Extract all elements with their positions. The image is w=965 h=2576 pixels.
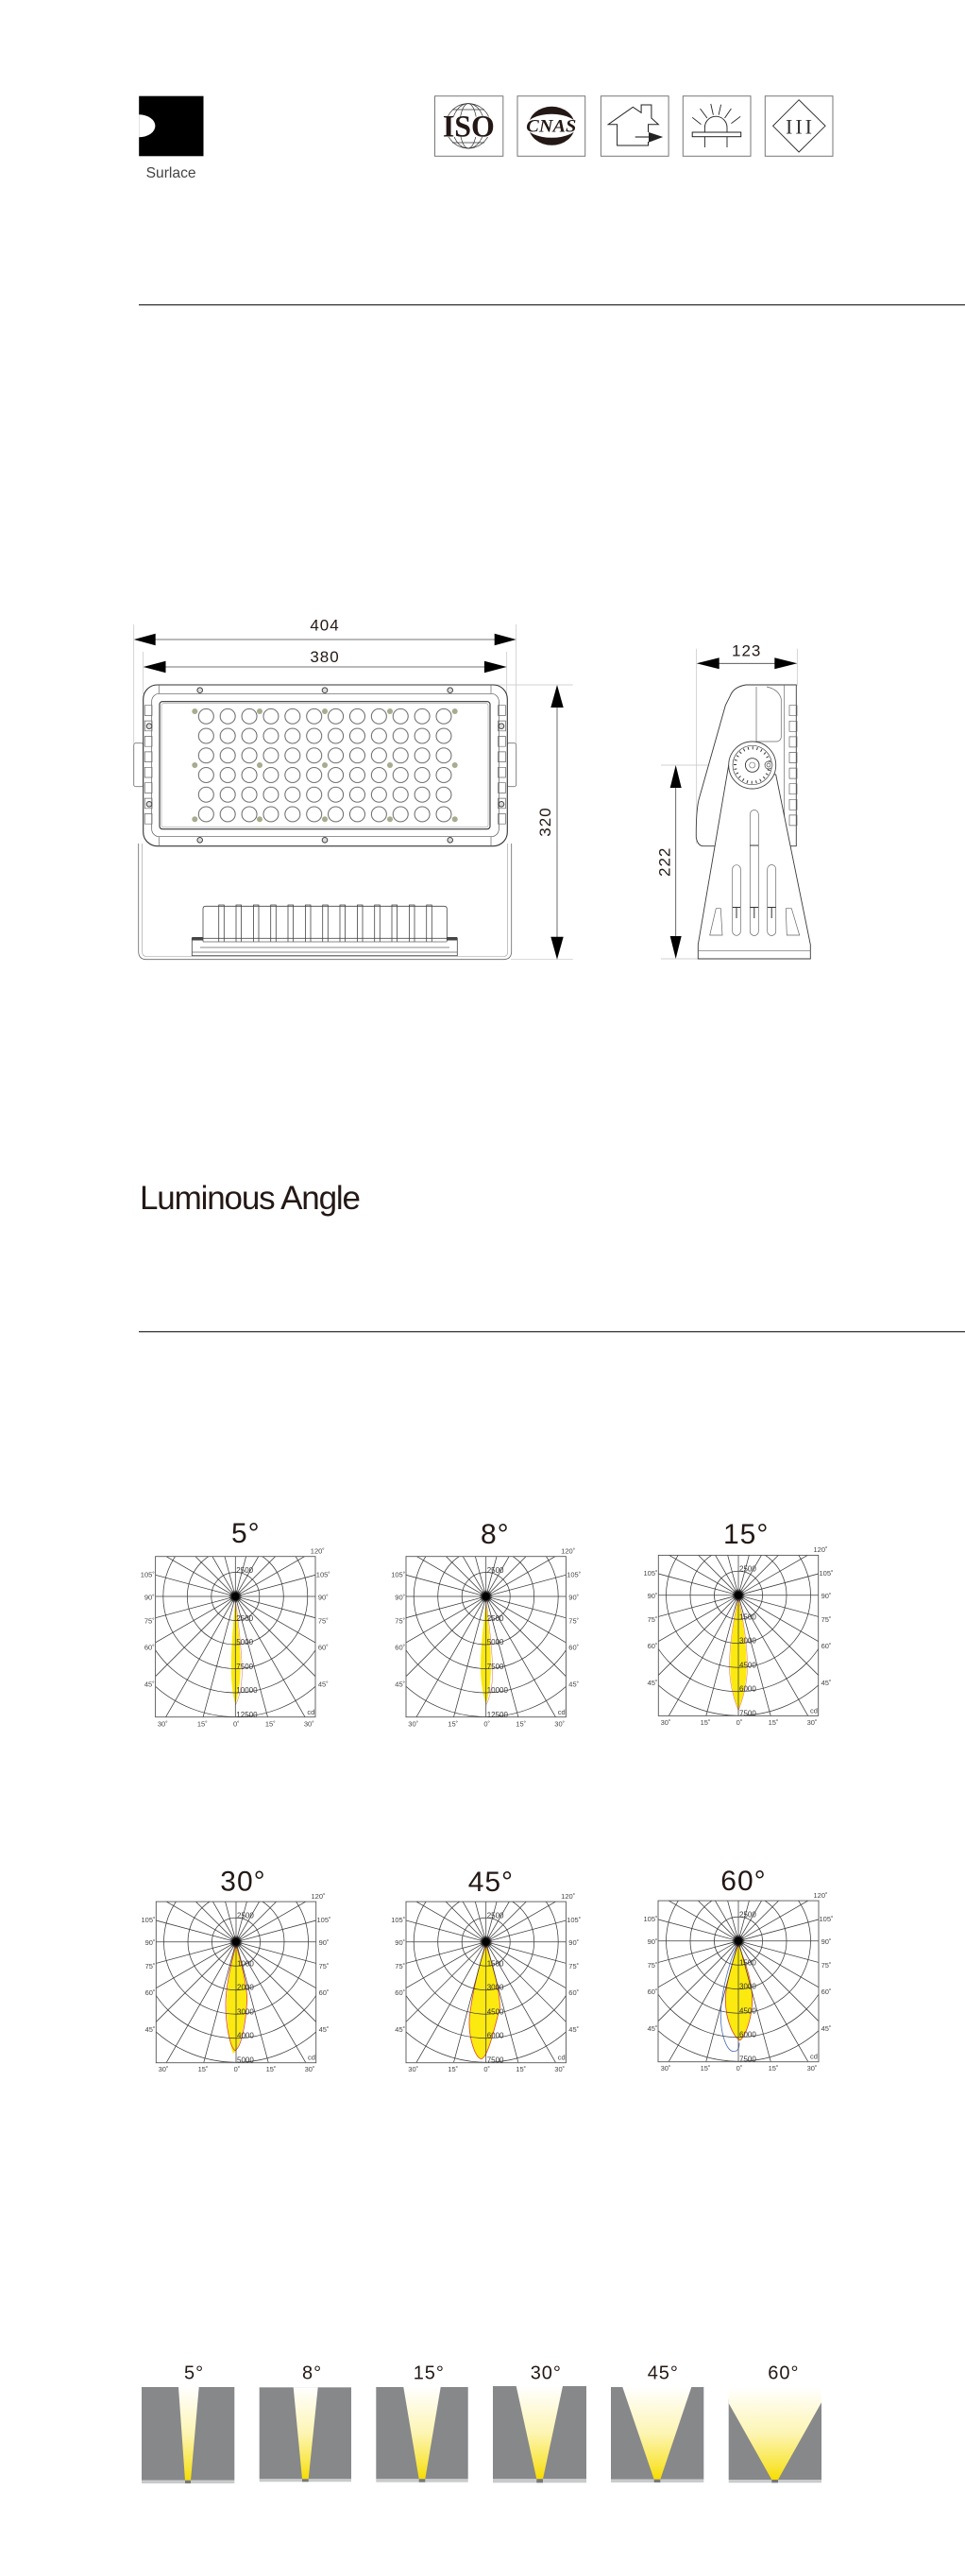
beam panel 60 degrees <box>729 2363 821 2482</box>
polar chart 60 degrees: 0˚ <box>736 2064 742 2073</box>
divider rule <box>139 304 965 305</box>
polar chart 5 degrees: 7500 <box>236 1663 254 1671</box>
chart title: 8° <box>481 1519 510 1550</box>
polar chart 8 degrees: 120˚ <box>561 1547 575 1555</box>
polar chart 45 degrees: 3000 <box>487 1984 504 1992</box>
polar chart 30 degrees: 90˚ <box>145 1938 155 1947</box>
dimension 404: 404 <box>310 617 340 635</box>
polar chart 45 degrees: 0˚ <box>483 2065 490 2073</box>
side view technical drawing <box>655 641 810 959</box>
polar chart 30 degrees: cd <box>308 2054 315 2062</box>
icon: class III <box>765 96 833 156</box>
polar chart 15 degrees: 15˚ <box>769 1718 778 1727</box>
polar chart 15 degrees: 90˚ <box>821 1592 831 1600</box>
beam panel 8 degrees <box>260 2363 351 2482</box>
stand <box>698 765 810 959</box>
beam panel 30 degrees: 30° <box>531 2363 562 2383</box>
dimension 380: 380 <box>310 648 340 666</box>
polar chart 8 degrees: 60˚ <box>395 1644 405 1651</box>
front view technical drawing <box>134 617 573 960</box>
lamp housing <box>696 685 797 846</box>
polar chart 5 degrees: 90˚ <box>318 1593 329 1602</box>
polar chart 8 degrees: 2500 <box>487 1566 504 1575</box>
polar chart 15 degrees: 75˚ <box>648 1615 657 1624</box>
divider rule <box>139 1331 965 1332</box>
polar chart 45 degrees: 90˚ <box>395 1938 405 1947</box>
polar chart 30 degrees: 120˚ <box>311 1892 326 1901</box>
polar chart 8 degrees: 15˚ <box>448 1719 458 1729</box>
polar chart 5 degrees: 60˚ <box>144 1644 155 1651</box>
polar chart 8 degrees <box>250 1360 722 1833</box>
polar chart 15 degrees: 4500 <box>739 1662 756 1670</box>
beam panel 15 degrees: 15° <box>414 2363 445 2383</box>
polar chart 5 degrees: 30˚ <box>304 1719 314 1729</box>
polar chart 8 degrees: 0˚ <box>483 1719 490 1729</box>
polar chart 30 degrees: 45˚ <box>319 2025 329 2034</box>
polar chart 60 degrees <box>502 1705 965 2177</box>
icon: CNAS: CNAS <box>526 116 576 136</box>
polar chart 8 degrees: 105˚ <box>391 1570 405 1579</box>
polar chart 30 degrees: 2500 <box>237 1912 254 1920</box>
chart title: 5° <box>231 1518 261 1549</box>
polar chart 8 degrees: 10000 <box>487 1686 508 1695</box>
polar chart 30 degrees: 15˚ <box>266 2065 276 2073</box>
polar chart 60 degrees: 60˚ <box>821 1987 831 1996</box>
extension lines <box>134 624 573 960</box>
polar chart 45 degrees: 7500 <box>487 2056 504 2065</box>
polar chart 60 degrees: 6000 <box>739 2031 756 2039</box>
polar chart 5 degrees: 0˚ <box>233 1719 240 1729</box>
polar chart 30 degrees: 60˚ <box>319 1988 329 1997</box>
polar chart 8 degrees: 105˚ <box>567 1570 581 1579</box>
polar chart 15 degrees: cd <box>810 1707 818 1715</box>
chart title: 30° <box>220 1866 266 1897</box>
polar chart 5 degrees: 15˚ <box>197 1719 208 1729</box>
polar chart 5 degrees: 5000 <box>236 1638 254 1646</box>
polar chart 60 degrees: 75˚ <box>648 1961 657 1970</box>
polar chart 45 degrees: 45˚ <box>395 2025 405 2034</box>
polar chart 15 degrees: 15˚ <box>701 1718 710 1727</box>
polar chart 45 degrees: 105˚ <box>567 1916 581 1924</box>
polar chart 45 degrees: 75˚ <box>395 1962 405 1970</box>
polar chart 5 degrees: 105˚ <box>141 1570 155 1579</box>
polar chart 45 degrees: 15˚ <box>448 2065 458 2073</box>
polar chart 60 degrees: 30˚ <box>661 2064 670 2073</box>
polar chart 45 degrees: 4500 <box>487 2008 504 2017</box>
dimension 320 <box>536 685 564 960</box>
dimension 222 <box>655 765 682 959</box>
extension lines <box>661 649 797 959</box>
polar chart 15 degrees: 6000 <box>739 1685 756 1694</box>
polar chart 15 degrees: 105˚ <box>819 1569 834 1578</box>
icon: indoor use house <box>601 96 669 156</box>
polar chart 8 degrees: 45˚ <box>568 1680 579 1689</box>
beam panel 30 degrees <box>493 2363 586 2482</box>
polar chart 5 degrees: 12500 <box>236 1711 258 1719</box>
lamp body <box>144 685 507 846</box>
polar chart 60 degrees: cd <box>810 2053 818 2061</box>
heat sink and base <box>192 905 457 956</box>
icon: surface mount <box>139 96 204 156</box>
polar chart 15 degrees: 45˚ <box>821 1679 831 1687</box>
polar chart 5 degrees: 45˚ <box>144 1680 155 1689</box>
polar chart 45 degrees: cd <box>558 2054 566 2062</box>
icon: class III: III <box>786 115 815 138</box>
polar chart 30 degrees: 1000 <box>237 1960 254 1969</box>
dimension 320: 320 <box>536 807 554 837</box>
polar chart 8 degrees: 5000 <box>487 1638 504 1646</box>
heading: Luminous Angle: Luminous Angle <box>140 1180 361 1217</box>
beam panel 45 degrees: 45° <box>648 2363 679 2383</box>
dimension 222: 222 <box>655 847 673 877</box>
polar chart 5 degrees: 10000 <box>236 1686 258 1695</box>
polar chart 8 degrees: 90˚ <box>395 1593 405 1602</box>
polar chart 30 degrees: 75˚ <box>145 1962 155 1970</box>
polar chart 5 degrees: 60˚ <box>318 1644 329 1651</box>
beam panel 5 degrees: 5° <box>184 2363 204 2383</box>
polar chart 5 degrees: 75˚ <box>318 1617 329 1625</box>
polar chart 15 degrees: 60˚ <box>821 1642 831 1650</box>
polar chart 45 degrees: 120˚ <box>561 1892 575 1901</box>
polar chart 15 degrees: 75˚ <box>821 1615 831 1624</box>
polar chart 15 degrees: 0˚ <box>736 1718 742 1727</box>
polar chart 60 degrees: 3000 <box>739 1983 756 1991</box>
polar chart 45 degrees: 1500 <box>487 1960 504 1969</box>
polar chart 15 degrees: 3000 <box>739 1637 756 1646</box>
polar chart 45 degrees: 30˚ <box>408 2065 418 2073</box>
side tabs <box>144 706 506 824</box>
polar chart 30 degrees: 60˚ <box>145 1988 155 1997</box>
screws <box>146 688 504 843</box>
polar chart 45 degrees: 75˚ <box>568 1962 579 1970</box>
mounting bracket <box>139 844 512 960</box>
polar chart 60 degrees: 15˚ <box>701 2064 710 2073</box>
polar chart 8 degrees: 12500 <box>487 1711 508 1719</box>
polar chart 5 degrees: 2500 <box>236 1614 254 1623</box>
icon: ISO <box>434 96 503 156</box>
chart title: 45° <box>468 1867 514 1898</box>
polar chart 45 degrees: 2500 <box>487 1912 504 1920</box>
polar chart 8 degrees: 15˚ <box>516 1719 526 1729</box>
beam panel 15 degrees <box>376 2363 468 2482</box>
polar chart 15 degrees: 1500 <box>739 1613 756 1622</box>
icon: LED <box>683 96 751 156</box>
polar chart 60 degrees: 90˚ <box>648 1937 657 1946</box>
adjustment dial <box>729 742 776 789</box>
beam panel 8 degrees: 8° <box>302 2363 322 2383</box>
label: Surlace: Surlace <box>146 165 196 181</box>
beam panel 45 degrees <box>611 2363 703 2482</box>
polar chart 30 degrees: 4000 <box>237 2032 254 2040</box>
polar chart 60 degrees: 105˚ <box>819 1915 834 1923</box>
polar chart 30 degrees: 75˚ <box>319 1962 329 1970</box>
polar chart 8 degrees: 60˚ <box>568 1644 579 1651</box>
polar chart 8 degrees: 7500 <box>487 1663 504 1671</box>
polar chart 60 degrees: 7500 <box>739 2056 756 2064</box>
polar chart 45 degrees: 15˚ <box>516 2065 526 2073</box>
polar chart 45 degrees: 6000 <box>487 2032 504 2040</box>
side brackets <box>134 743 516 787</box>
polar chart 30 degrees: 30˚ <box>159 2065 168 2073</box>
polar chart 5 degrees: 105˚ <box>316 1570 330 1579</box>
polar chart 5 degrees: 15˚ <box>265 1719 276 1729</box>
polar chart 45 degrees: 30˚ <box>554 2065 565 2073</box>
polar chart 60 degrees: 45˚ <box>821 2024 831 2033</box>
polar chart 60 degrees: 4500 <box>739 2007 756 2016</box>
polar chart 5 degrees: 45˚ <box>318 1680 329 1689</box>
polar chart 45 degrees: 60˚ <box>568 1988 579 1997</box>
polar chart 30 degrees: 2000 <box>237 1984 254 1992</box>
polar chart 30 degrees: 30˚ <box>305 2065 314 2073</box>
polar chart 5 degrees: 75˚ <box>144 1617 155 1625</box>
polar chart 30 degrees <box>0 1706 472 2178</box>
polar chart 15 degrees: 7500 <box>739 1710 756 1718</box>
polar chart 30 degrees: 0˚ <box>234 2065 240 2073</box>
polar chart 30 degrees: 15˚ <box>198 2065 208 2073</box>
polar chart 15 degrees: 45˚ <box>648 1679 657 1687</box>
polar chart 15 degrees: 120˚ <box>813 1545 828 1554</box>
polar chart 5 degrees: 2500 <box>236 1566 254 1575</box>
polar chart 8 degrees: 45˚ <box>395 1680 405 1689</box>
polar chart 8 degrees: 90˚ <box>568 1593 579 1602</box>
polar chart 45 degrees: 105˚ <box>391 1916 405 1924</box>
polar chart 30 degrees: 90˚ <box>319 1938 329 1947</box>
polar chart 15 degrees: 105˚ <box>643 1569 658 1578</box>
polar chart 15 degrees: 30˚ <box>661 1718 670 1727</box>
polar chart 60 degrees: 15˚ <box>769 2064 778 2073</box>
polar chart 60 degrees: 75˚ <box>821 1961 831 1970</box>
polar chart 60 degrees: 1500 <box>739 1959 756 1968</box>
polar chart 60 degrees: 90˚ <box>821 1937 831 1946</box>
polar chart 5 degrees: 30˚ <box>158 1719 168 1729</box>
dimension 123 <box>697 641 797 669</box>
beam panel 60 degrees: 60° <box>768 2363 800 2383</box>
certification icons row <box>434 96 833 156</box>
icon: CNAS <box>517 96 585 156</box>
olive fixing dots <box>192 708 458 822</box>
icon: ISO: ISO <box>443 110 495 144</box>
polar chart 60 degrees: 45˚ <box>648 2024 657 2033</box>
polar chart 45 degrees: 90˚ <box>568 1938 579 1947</box>
polar chart 8 degrees: 75˚ <box>395 1617 405 1625</box>
dimension 404 <box>134 617 516 645</box>
header: surface mount icon and label <box>139 96 204 181</box>
polar chart 60 degrees: 120˚ <box>813 1891 828 1900</box>
polar chart 45 degrees <box>250 1706 722 2178</box>
polar chart 5 degrees <box>0 1360 471 1833</box>
polar chart 45 degrees: 45˚ <box>568 2025 579 2034</box>
LED array <box>195 707 454 824</box>
beam panel 5 degrees <box>142 2363 234 2483</box>
polar chart 45 degrees: 60˚ <box>395 1988 405 1997</box>
chart title: 15° <box>723 1519 769 1550</box>
polar chart 8 degrees: 30˚ <box>554 1719 565 1729</box>
polar chart 60 degrees: 30˚ <box>807 2064 817 2073</box>
polar chart 15 degrees <box>502 1359 965 1832</box>
dimension 123: 123 <box>732 641 761 659</box>
polar chart 30 degrees: 3000 <box>237 2008 254 2017</box>
polar chart 5 degrees: cd <box>307 1708 314 1716</box>
polar chart 60 degrees: 60˚ <box>648 1987 657 1996</box>
polar chart 60 degrees: 2500 <box>739 1911 756 1919</box>
polar chart 5 degrees: 120˚ <box>311 1547 325 1555</box>
dimension 380 <box>144 648 507 673</box>
polar chart 15 degrees: 2500 <box>739 1565 756 1574</box>
polar chart 30 degrees: 45˚ <box>145 2025 155 2034</box>
polar chart 8 degrees: 75˚ <box>568 1617 579 1625</box>
polar chart 15 degrees: 60˚ <box>648 1642 657 1650</box>
polar chart 8 degrees: 30˚ <box>408 1719 418 1729</box>
chart title: 60° <box>720 1866 767 1897</box>
polar chart 60 degrees: 105˚ <box>643 1915 658 1923</box>
polar chart 30 degrees: 105˚ <box>141 1916 156 1924</box>
polar chart 30 degrees: 105˚ <box>316 1916 331 1924</box>
polar chart 5 degrees: 90˚ <box>144 1593 155 1602</box>
polar chart 15 degrees: 30˚ <box>807 1718 817 1727</box>
polar chart 8 degrees: cd <box>558 1708 566 1716</box>
polar chart 15 degrees: 90˚ <box>648 1592 657 1600</box>
polar chart 8 degrees: 2500 <box>487 1614 504 1623</box>
polar chart 30 degrees: 5000 <box>237 2056 254 2065</box>
